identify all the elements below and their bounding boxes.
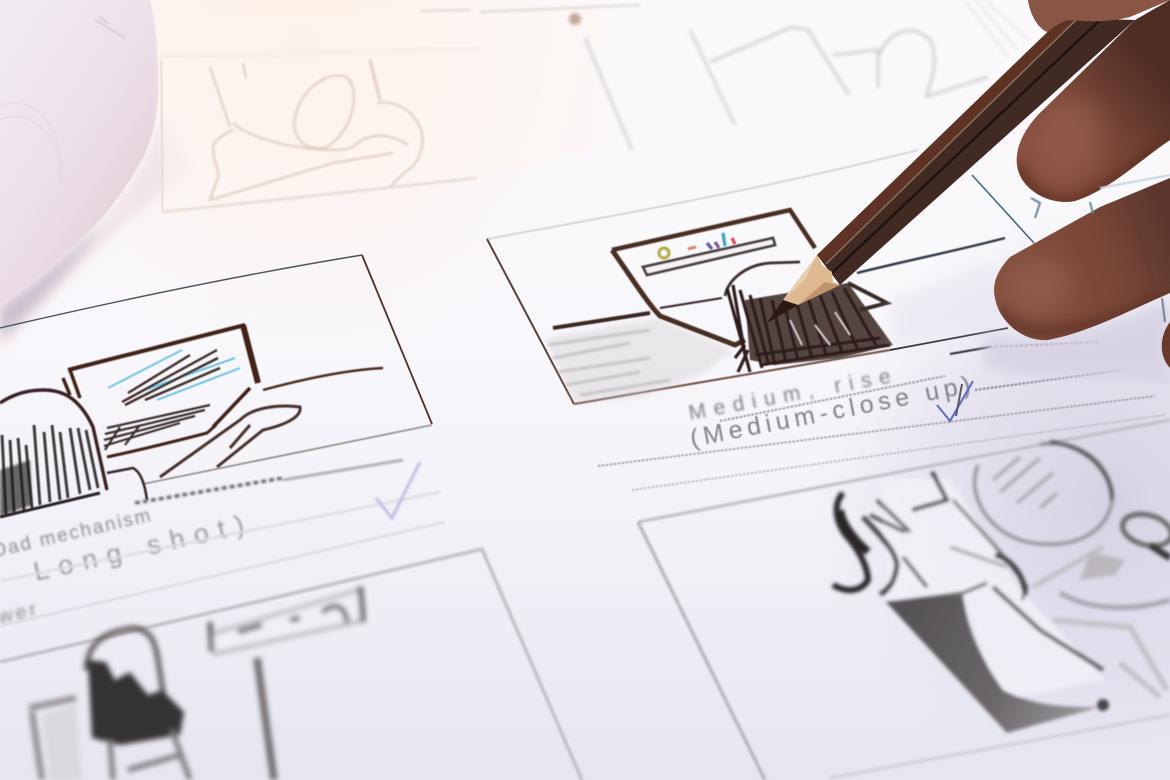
- sketch: woman with thought bubble: [833, 442, 1170, 733]
- handwritten caption: long shot: Long shot): [31, 509, 247, 587]
- laptop outline: [68, 325, 245, 370]
- paper roll: [0, 0, 159, 308]
- shadow of paper roll: [0, 120, 190, 350]
- far right sheet detail: [1031, 175, 1170, 322]
- blue check mark: [937, 381, 973, 421]
- sketch: laptop and character in left frame: [0, 325, 383, 517]
- screen lines: [108, 350, 240, 400]
- pencil body: [817, 18, 1135, 285]
- top-left storyboard sheet: [157, 5, 735, 212]
- table details: [1033, 547, 1103, 587]
- search box: [643, 238, 775, 275]
- laptop outline: [612, 210, 815, 250]
- handwritten caption: medium close up: Medium, rise: [687, 365, 892, 425]
- handwritten caption: medium close up: (Medium-close up): [688, 371, 973, 453]
- hand: [990, 0, 1170, 368]
- pencil lead: [767, 300, 798, 323]
- hair: [833, 493, 868, 590]
- hair hatching: [745, 283, 893, 365]
- keyboard hatching: [104, 405, 210, 450]
- head outline: [725, 262, 800, 296]
- ring object: [1119, 509, 1170, 551]
- figure body highlight: [880, 478, 1105, 700]
- post and box: [257, 658, 274, 780]
- shirt outline: [887, 583, 987, 603]
- storyboard frame: bottom left: [0, 549, 582, 780]
- dark skirt: [887, 595, 1100, 733]
- finger: palm edge: [1162, 322, 1170, 368]
- desk shading: [545, 318, 735, 403]
- lavender check mark: [376, 462, 420, 518]
- storyboard frame: left: [0, 255, 432, 484]
- blurred sketch: top-left figure: [210, 5, 640, 200]
- storyboard frame: centre: [487, 150, 1034, 404]
- finger: top: [1028, 0, 1170, 32]
- handwritten caption: long shot: [0, 460, 445, 629]
- shadow under hand: [985, 300, 1170, 385]
- pencil: [767, 18, 1135, 323]
- blurred sketch: top-right figure: [569, 0, 1028, 97]
- finger: middle: [1016, 0, 1170, 202]
- handwritten caption: medium close up: [598, 342, 1165, 490]
- sign: [212, 588, 364, 654]
- thought bubble: [975, 443, 1112, 544]
- mouse and hand: [160, 406, 300, 477]
- coloured logo: [659, 233, 735, 258]
- finger: lower: [990, 170, 1170, 345]
- pencil wood tip: [783, 255, 840, 305]
- sketch: laptop and character in centre frame: [545, 210, 1005, 403]
- chair: [86, 628, 165, 705]
- blurred sketch: chair and sign: [29, 587, 364, 780]
- shadow under pencil: [890, 260, 1020, 345]
- storyboard frame: bottom right: [638, 420, 1170, 780]
- head and hair: [0, 390, 107, 490]
- neck and arm: [903, 557, 927, 587]
